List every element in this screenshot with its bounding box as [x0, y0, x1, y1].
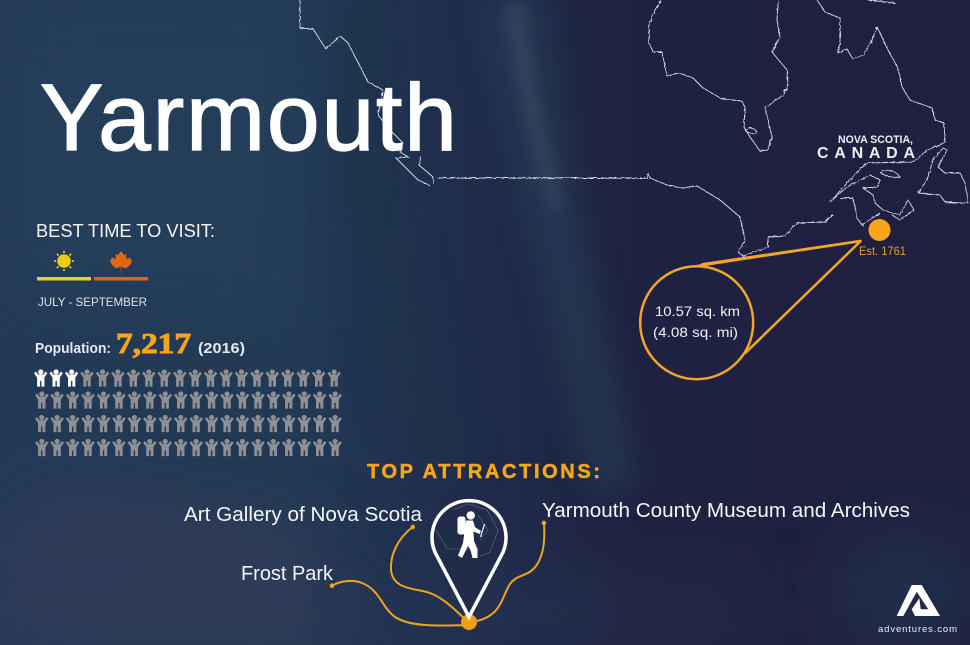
pin base dot	[461, 614, 477, 630]
attraction: Yarmouth County Museum: Yarmouth County Museum and Archives	[542, 500, 910, 522]
map of Canada outline	[300, 0, 968, 256]
area callout: 10.57 sq. km	[655, 304, 740, 319]
population heading: (2016)	[198, 340, 245, 357]
logo: adventures.com	[878, 624, 957, 635]
logo	[878, 585, 957, 635]
map labels: CANADA	[817, 145, 915, 162]
months text: JULY - SEPTEMBER	[38, 297, 147, 309]
population heading: Population:	[35, 340, 111, 357]
population heading	[35, 328, 245, 360]
best time to visit heading: BEST TIME TO VISIT:	[36, 221, 215, 241]
attraction: Art Gallery: Art Gallery of Nova Scotia	[184, 504, 423, 526]
autumn bar	[94, 277, 148, 280]
top attractions heading: TOP ATTRACTIONS:	[367, 461, 600, 483]
connector routes	[330, 521, 546, 626]
map labels	[817, 134, 915, 162]
population heading: 7,217	[116, 328, 191, 360]
established year: Est. 1761	[859, 246, 906, 258]
map labels: NOVA SCOTIA,	[838, 134, 913, 146]
icon: sun	[54, 251, 74, 271]
population pictogram	[34, 369, 342, 456]
summer bar	[37, 277, 91, 280]
area callout: (4.08 sq. mi)	[653, 325, 738, 340]
attraction: Frost Park: Frost Park	[241, 563, 334, 585]
area callout	[640, 241, 861, 379]
location marker	[868, 219, 890, 241]
title: Yarmouth	[40, 65, 457, 171]
icon: maple leaf	[110, 251, 132, 274]
icon: hiker	[458, 511, 484, 558]
map pin with hiker	[432, 501, 506, 617]
